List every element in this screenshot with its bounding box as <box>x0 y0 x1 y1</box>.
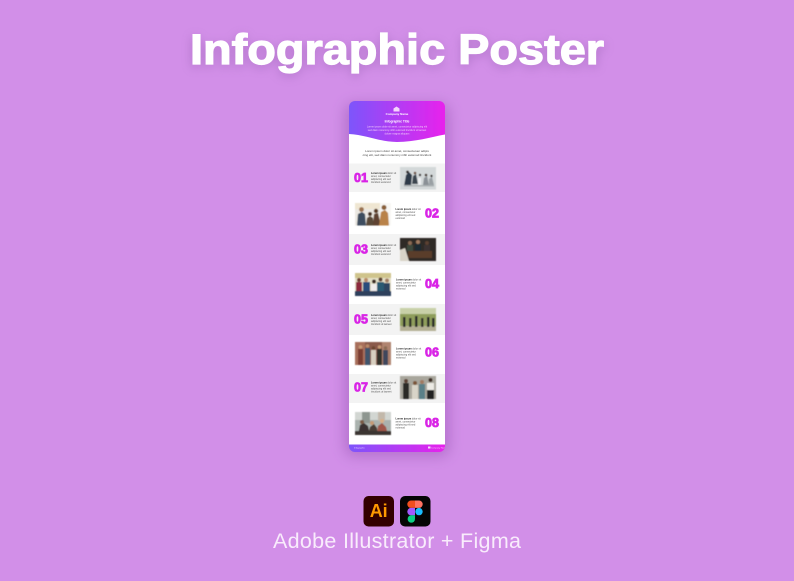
row 02: euismod <box>396 217 406 220</box>
poster card <box>349 101 448 452</box>
row 02: Lorem ipsum dolor sit <box>396 208 421 211</box>
header description: dolore magna aliquam <box>385 132 409 136</box>
row 07: tincidunt ut laoreet <box>371 390 392 394</box>
row 02 <box>355 203 439 226</box>
row 08: euismod <box>396 426 406 430</box>
row 06: adipiscing elit sed <box>396 354 416 356</box>
row 01: Lorem ipsum dolor sit <box>371 172 396 175</box>
row 03: amet, consectetur <box>371 247 391 250</box>
row 01: adipiscing elit sed <box>371 178 391 181</box>
footer bar: Infographic <box>354 446 366 450</box>
infographic title: Infographic Title <box>385 120 410 124</box>
row 01 <box>349 164 445 192</box>
intro text: cing elit, sed diam nonummy nibh euismod tincidunt <box>363 153 432 157</box>
row 08: Lorem ipsum dolor sit <box>396 418 421 420</box>
icon: Adobe Illustrator <box>364 496 394 526</box>
row 06 <box>355 342 439 365</box>
footer bar <box>349 444 448 452</box>
photo 06 <box>355 342 391 365</box>
photo 01 <box>400 167 436 190</box>
row 04: amet, consectetur <box>396 282 416 284</box>
row 03: adipiscing elit sed <box>371 250 391 253</box>
company name: Company Name <box>386 112 409 116</box>
row 06: 06 <box>425 346 439 360</box>
photo 03 <box>400 238 436 261</box>
row 05: amet, consectetur <box>371 317 391 320</box>
row 05: adipiscing elit sed <box>371 320 391 323</box>
intro text <box>362 150 432 156</box>
header description: Lorem ipsum dolor sit amet, consectetur adipiscing elit <box>367 126 427 128</box>
card shadow <box>345 104 449 456</box>
row 03 <box>349 234 445 265</box>
row 06: amet, consectetur <box>396 350 416 354</box>
title: Infographic Poster <box>189 29 605 77</box>
header description <box>367 126 427 136</box>
row 06: Lorem ipsum dolor sit <box>396 348 421 350</box>
photo 02 <box>355 203 391 226</box>
row 03: Lorem ipsum dolor sit <box>371 244 396 247</box>
icon: company logo <box>394 106 400 112</box>
row 04 <box>355 273 439 296</box>
photo 07 <box>400 376 436 399</box>
row 05: Lorem ipsum dolor sit <box>371 314 396 317</box>
row 02: 02 <box>425 206 439 220</box>
row 07: amet, consectetur <box>371 384 391 388</box>
row 07: Lorem ipsum dolor sit <box>371 382 396 384</box>
row 05 <box>349 304 445 335</box>
icon: Figma <box>400 496 430 526</box>
row 08: 08 <box>425 416 439 430</box>
title: Infographic Poster <box>190 26 604 74</box>
header banner <box>349 101 445 142</box>
row 05: tincidunt ut laoreet <box>371 323 392 326</box>
row 05: 05 <box>354 312 368 326</box>
caption: Adobe Illustrator + Figma <box>273 529 521 553</box>
icon: Adobe Illustrator: Ai <box>370 501 388 521</box>
row 06: euismod <box>396 356 406 360</box>
row 04: adipiscing elit sed <box>396 284 416 288</box>
header description: sed diam nonummy nibh euismod tincidunt ut laoreet <box>368 129 427 132</box>
row 03: 03 <box>354 242 368 256</box>
row 02: amet, consectetur <box>396 211 416 214</box>
intro text: Lorem ipsum dolor sit amet, consectetuer adipis <box>365 149 429 153</box>
row 08 <box>355 412 439 435</box>
row 02: adipiscing elit sed <box>396 214 416 217</box>
row 07: 07 <box>354 380 368 394</box>
row 03: tincidunt euismod <box>371 253 391 256</box>
row 07: adipiscing elit sed <box>371 388 391 390</box>
photo 08 <box>355 412 391 435</box>
row 08: adipiscing elit sed <box>396 424 416 426</box>
footer bar: Company Name <box>431 448 448 450</box>
row 04: Lorem ipsum dolor sit <box>396 278 421 282</box>
row 04: euismod <box>396 288 406 290</box>
row 07 <box>349 374 445 403</box>
row 01: tincidunt euismod <box>371 181 391 184</box>
row 01: 01 <box>354 171 368 185</box>
photo 05 <box>400 308 436 331</box>
row 08: amet, consectetur <box>396 420 416 424</box>
photo 04 <box>355 273 391 296</box>
row 04: 04 <box>425 277 439 291</box>
row 01: amet, consectetur <box>371 175 391 178</box>
